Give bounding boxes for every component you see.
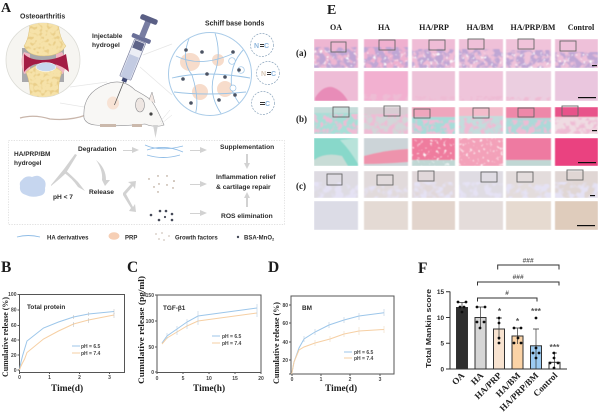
label: Schiff base bonds: Schiff base bonds xyxy=(205,20,265,28)
error bars xyxy=(74,309,114,327)
icon: mouse xyxy=(20,82,172,127)
micrographs: row c, detail xyxy=(314,201,598,230)
curve pH 7.4 xyxy=(292,330,384,374)
legend: schematic: HA derivatives xyxy=(47,236,89,242)
panel letter D: D xyxy=(268,259,279,276)
chart frame and ticks xyxy=(282,296,394,383)
micrographs: row b, overview xyxy=(314,107,598,134)
legend: pH = 6.5 xyxy=(81,344,101,350)
panel letter C: C xyxy=(127,259,138,276)
axes xyxy=(437,289,567,374)
panel letter F: F xyxy=(418,260,427,277)
icon: syringe xyxy=(105,13,159,109)
panel letter E: E xyxy=(327,3,336,18)
chart frame and ticks: 100 xyxy=(8,292,17,298)
legend: pH = 6.5 xyxy=(222,334,242,340)
legend: schematic: PRP xyxy=(125,236,137,242)
legend xyxy=(72,344,101,357)
panel: F Mankin score chart xyxy=(418,258,567,413)
icon: N=C bond 3: C xyxy=(265,101,270,108)
chart frame and ticks: 100 xyxy=(146,319,154,325)
significance brackets: # xyxy=(505,290,509,297)
axes: 0 xyxy=(440,366,444,374)
label: Total protein: Total protein xyxy=(27,304,65,311)
arrows xyxy=(51,147,250,216)
chart frame and ticks xyxy=(8,292,124,381)
icon: N=C bond 3 xyxy=(252,92,274,114)
chart frame and ticks: 60 xyxy=(282,321,288,327)
chart frame and ticks: 80 xyxy=(11,308,17,314)
legend: schematic: 2 xyxy=(272,236,275,242)
icon: N=C bond 1 xyxy=(250,34,274,56)
label: HA/PRP/BM hydrogel: hydrogel xyxy=(14,160,42,167)
panel: release mechanism xyxy=(8,125,284,224)
significance brackets: ### xyxy=(512,274,524,281)
curve pH 6.5 xyxy=(292,313,384,374)
icon: HA derivative strands xyxy=(145,145,183,158)
label: HA/PRP/BM hydrogel: HA/PRP/BM xyxy=(14,151,50,158)
micrographs: row b, detail xyxy=(314,138,598,166)
chart frame and ticks: 3 xyxy=(379,377,382,383)
label: Injectable hydrogel: hydrogel xyxy=(92,42,120,49)
panel: E histology xyxy=(296,3,598,230)
column headings: HA/BM xyxy=(466,23,494,32)
micrographs: row a, overview xyxy=(314,39,598,68)
chart frame and ticks: 1 xyxy=(320,377,323,383)
chart frame and ticks: 1 xyxy=(48,375,51,381)
legend: pH = 7.4 xyxy=(354,356,374,362)
legend xyxy=(344,350,374,362)
chart frame and ticks: 0 xyxy=(156,376,159,382)
chart frame and ticks: 60 xyxy=(11,323,17,329)
chart frame and ticks: 40 xyxy=(11,338,17,344)
row labels: (c) xyxy=(296,181,306,191)
panel: B total protein release xyxy=(0,259,124,394)
y axis title: Cumulative release (%) xyxy=(0,297,10,377)
data points xyxy=(457,301,559,369)
label: Injectable hydrogel: Injectable xyxy=(92,33,123,40)
label: Release: Release xyxy=(89,189,114,196)
significance brackets: ### xyxy=(522,258,534,264)
x axis title: Time(d) xyxy=(51,383,83,394)
icon: BSA-MnO2 dots xyxy=(150,210,173,221)
chart frame and ticks: 50 xyxy=(148,345,154,351)
chart frame and ticks: 150 xyxy=(146,293,154,299)
row labels: (b) xyxy=(296,114,307,124)
bars xyxy=(456,308,560,369)
x axis title: Time(d) xyxy=(325,383,357,394)
chart frame and ticks: 0 xyxy=(291,377,294,383)
heading: Osteoarthritis: Osteoarthritis xyxy=(20,14,65,20)
bar labels: HA/PRP xyxy=(473,370,504,401)
chart frame and ticks: 5 xyxy=(182,376,185,382)
label: Degradation: Degradation xyxy=(78,146,116,153)
chart frame and ticks: 0 xyxy=(18,375,21,381)
chart frame and ticks: 20 xyxy=(258,376,264,382)
x axis title: Time(h) xyxy=(193,383,225,394)
legend: pH = 7.4 xyxy=(222,341,242,347)
curve pH 7.4 xyxy=(20,315,114,370)
significance stars: *** xyxy=(550,342,560,352)
bar labels: HA xyxy=(469,370,486,387)
arrow from mouse xyxy=(153,125,158,138)
legend: schematic: Growth factors xyxy=(175,236,218,242)
row labels: (a) xyxy=(296,48,306,58)
chart frame and ticks: 20 xyxy=(282,358,288,364)
error bars xyxy=(167,304,257,339)
column headings xyxy=(330,23,595,32)
icon: N=C bond 2: N xyxy=(261,71,266,78)
bar labels: OA xyxy=(450,370,467,387)
icon: N=C bond 1: C xyxy=(264,43,269,50)
bar labels: HA/BM xyxy=(494,370,523,399)
chart frame and ticks: 3 xyxy=(108,375,111,381)
legend: pH = 6.5 xyxy=(354,350,374,356)
scale bars xyxy=(577,65,597,226)
label: Inflammation relief and cartilage repair: Inflammation relief xyxy=(216,174,276,181)
row labels xyxy=(296,48,307,191)
column headings: Control xyxy=(568,23,595,32)
label: ROS elimination: ROS elimination xyxy=(221,213,273,220)
icon: hydrogel cloud xyxy=(20,176,46,197)
chart frame and ticks: 40 xyxy=(282,340,288,346)
chart frame and ticks: 20 xyxy=(11,353,17,359)
axes: 10 xyxy=(437,315,444,322)
panel letter A: A xyxy=(1,1,12,16)
chart frame and ticks: 0 xyxy=(14,368,17,374)
icon: growth factor dots xyxy=(148,175,175,193)
curve pH 6.5 xyxy=(20,312,114,370)
legend: schematic: BSA-MnO xyxy=(244,236,272,242)
curve pH 6.5 xyxy=(162,308,257,343)
label: Inflammation relief and cartilage repair: & cartilage repair xyxy=(216,184,271,191)
legend: schematic xyxy=(17,232,275,242)
chart frame and ticks: 0 xyxy=(151,370,154,376)
label: TGF-β1: TGF-β1 xyxy=(163,305,186,312)
icon: joint circle xyxy=(6,22,80,98)
column headings: OA xyxy=(330,23,342,32)
label: BM: BM xyxy=(302,305,312,312)
chart frame and ticks xyxy=(146,293,264,382)
axes: 5 xyxy=(440,340,444,348)
panel: A schematic xyxy=(1,1,280,127)
significance stars: *** xyxy=(531,306,542,316)
bar labels xyxy=(450,370,560,413)
bar labels: HA/PRP/BM xyxy=(498,370,541,413)
icon: N=C bond 1: N xyxy=(254,43,259,50)
selection boxes xyxy=(327,39,583,185)
column headings: HA xyxy=(378,23,390,32)
zoom lines xyxy=(60,44,172,108)
y axis title: Cumulative release (%) xyxy=(271,302,281,384)
significance stars: * xyxy=(498,306,502,316)
column headings: HA/PRP/BM xyxy=(511,23,556,32)
axes: 15 xyxy=(437,289,444,296)
significance brackets xyxy=(478,258,559,302)
curve pH 7.4 xyxy=(162,313,257,344)
bar labels: Control xyxy=(531,370,560,399)
icon: hydrogel network xyxy=(168,32,252,116)
icon: N=C bond 2: C xyxy=(271,71,276,78)
significance stars: * xyxy=(516,316,520,326)
y axis title: Total Mankin score xyxy=(426,289,433,368)
chart frame and ticks: 10 xyxy=(206,376,212,382)
micrographs: row c, overview xyxy=(314,171,598,198)
chart frame and ticks: 2 xyxy=(78,375,81,381)
significance stars xyxy=(498,306,560,352)
legend xyxy=(212,334,242,347)
label: pH below 7: pH < 7 xyxy=(53,194,73,201)
error bars xyxy=(304,309,384,342)
label: Supplementation: Supplementation xyxy=(220,144,274,151)
chart frame and ticks: 80 xyxy=(282,303,288,309)
error bars xyxy=(459,302,557,369)
panel: C TGF-β1 release xyxy=(127,259,264,394)
y axis title: Cumulative release (pg/ml) xyxy=(136,276,146,384)
legend: pH = 7.4 xyxy=(81,351,101,357)
panel: D BM release xyxy=(268,259,394,394)
micrographs: row a, detail xyxy=(314,71,598,101)
chart frame and ticks: 15 xyxy=(232,376,238,382)
panel letter B: B xyxy=(1,259,11,276)
chart frame and ticks: 2 xyxy=(349,377,352,383)
icon: N=C bond 2 xyxy=(256,62,280,84)
column headings: HA/PRP xyxy=(419,23,449,32)
